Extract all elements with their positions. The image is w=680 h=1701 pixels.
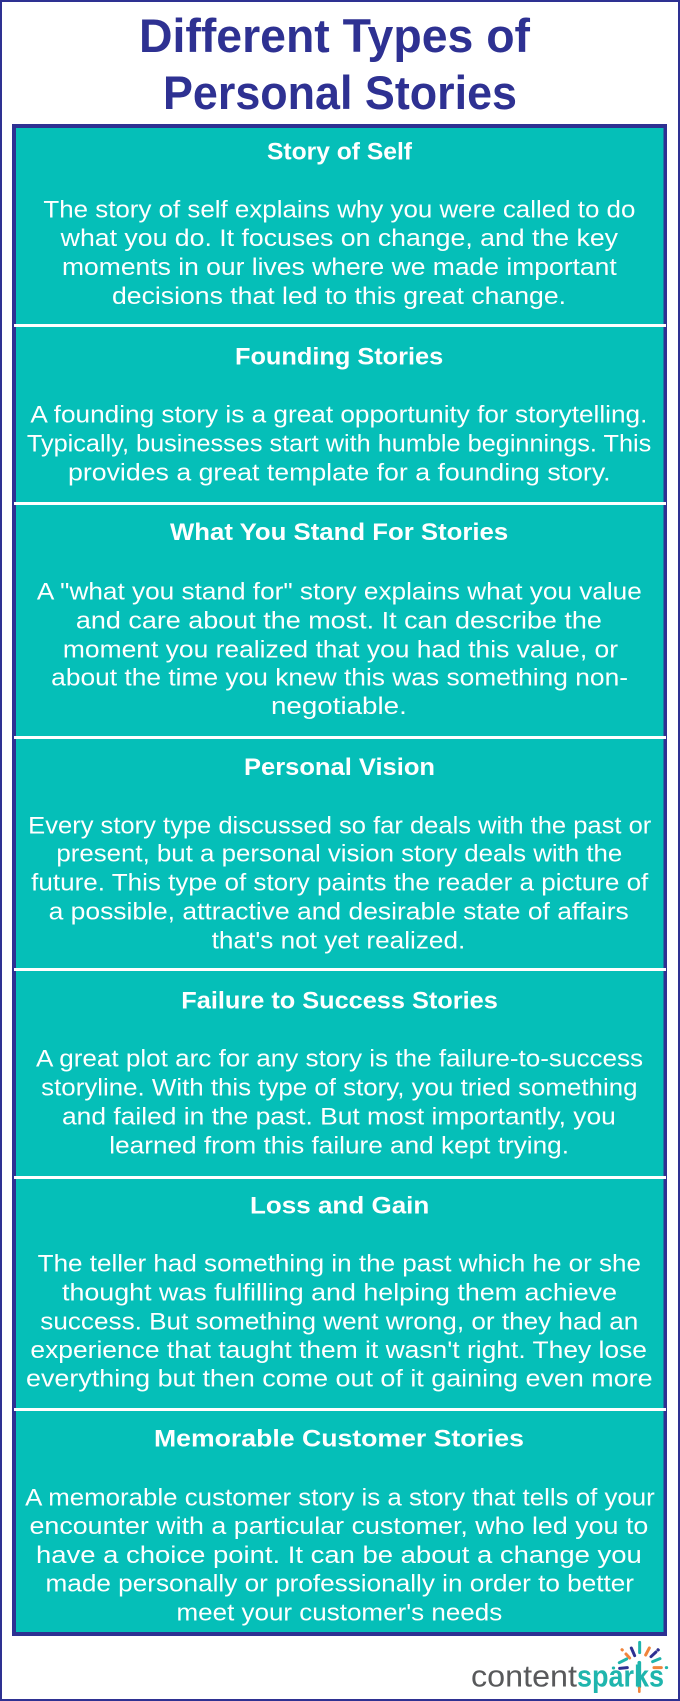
panel: founding stories bbox=[16, 325, 664, 503]
text block: story of self bbox=[43, 196, 635, 310]
text block: loss and gain: success. But something went wrong, or they had an bbox=[40, 1308, 638, 1335]
text block: founding stories: provides a great template for a founding story. bbox=[68, 460, 611, 487]
icon: sparks and pencil bbox=[613, 1642, 667, 1692]
title: Different Types of bbox=[139, 9, 530, 62]
text block: what you stand for stories: negotiable. bbox=[271, 693, 407, 720]
heading: loss and gain: Loss and Gain bbox=[250, 1192, 429, 1219]
text block: what you stand for stories: about the time you knew this was something non- bbox=[51, 664, 628, 692]
logo: contentsparks bbox=[471, 1642, 667, 1694]
text block: failure to success stories: learned from this failure and kept trying. bbox=[109, 1133, 569, 1160]
panel: story of self bbox=[16, 128, 664, 325]
panel: what you stand for stories bbox=[16, 503, 664, 737]
text block: loss and gain: The teller had something in the past which he or she bbox=[38, 1251, 641, 1278]
text block: personal vision: a possible, attractive and desirable state of affairs bbox=[49, 898, 629, 925]
text block: personal vision: that's not yet realized. bbox=[212, 927, 465, 954]
heading: story of self: Story of Self bbox=[267, 138, 413, 165]
heading: memorable customer stories: Memorable Customer Stories bbox=[154, 1426, 524, 1453]
logo wordmark: sparks bbox=[577, 1659, 664, 1694]
text block: personal vision: future. This type of story paints the reader a picture of bbox=[31, 870, 649, 897]
text block: loss and gain: experience that taught them it wasn't right. They lose bbox=[30, 1337, 647, 1364]
text block: founding stories bbox=[27, 401, 651, 487]
text block: memorable customer stories: encounter with a particular customer, who led you to bbox=[30, 1513, 648, 1540]
panel: failure to success stories bbox=[16, 969, 664, 1177]
text block: founding stories: A founding story is a great opportunity for storytelling. bbox=[30, 401, 647, 428]
text block: failure to success stories: storyline. With this type of story, you tried something bbox=[41, 1075, 637, 1102]
text block: story of self: The story of self explains why you were called to do bbox=[43, 196, 635, 223]
text block: memorable customer stories: A memorable customer story is a story that tells of your bbox=[25, 1485, 655, 1512]
title: Personal Stories bbox=[163, 66, 517, 119]
text block: what you stand for stories: moment you realized that you had this value, or bbox=[63, 636, 618, 663]
text block: founding stories: Typically, businesses start with humble beginnings. This bbox=[27, 431, 651, 458]
text block: memorable customer stories bbox=[25, 1485, 655, 1627]
panel: memorable customer stories bbox=[16, 1409, 664, 1632]
text block: failure to success stories: and failed in the past. But most importantly, you bbox=[62, 1104, 616, 1131]
heading: founding stories: Founding Stories bbox=[235, 343, 443, 370]
text block: story of self: decisions that led to this great change. bbox=[112, 283, 566, 310]
text block: what you stand for stories bbox=[37, 578, 642, 720]
text block: personal vision: Every story type discussed so far deals with the past or bbox=[28, 812, 651, 839]
text block: memorable customer stories: have a choice point. It can be about a change you bbox=[36, 1542, 642, 1569]
text block: memorable customer stories: meet your customer's needs bbox=[176, 1600, 502, 1627]
text block: loss and gain: thought was fulfilling and helping them achieve bbox=[62, 1279, 617, 1306]
logo wordmark: content bbox=[471, 1659, 577, 1694]
text block: personal vision bbox=[28, 812, 651, 954]
text block: failure to success stories: A great plot arc for any story is the failure-to-success bbox=[36, 1046, 643, 1073]
title bbox=[139, 9, 530, 119]
text block: what you stand for stories: A "what you stand for" story explains what you value bbox=[37, 578, 642, 605]
panel: loss and gain bbox=[16, 1177, 664, 1409]
text block: loss and gain bbox=[26, 1251, 653, 1393]
text block: memorable customer stories: made personally or professionally in order to better bbox=[46, 1571, 634, 1598]
heading: personal vision: Personal Vision bbox=[244, 754, 435, 781]
text block: what you stand for stories: and care about the most. It can describe the bbox=[76, 607, 602, 634]
text block: story of self: moments in our lives where we made important bbox=[62, 254, 617, 281]
panel: personal vision bbox=[16, 737, 664, 969]
heading: what you stand for stories: What You Stand For Stories bbox=[170, 519, 508, 546]
text block: failure to success stories bbox=[36, 1046, 643, 1160]
text block: personal vision: present, but a personal vision story deals with the bbox=[56, 841, 622, 868]
text block: story of self: what you do. It focuses on change, and the key bbox=[60, 225, 618, 252]
text block: loss and gain: everything but then come out of it gaining even more bbox=[26, 1366, 653, 1393]
heading: failure to success stories: Failure to Success Stories bbox=[181, 987, 498, 1014]
